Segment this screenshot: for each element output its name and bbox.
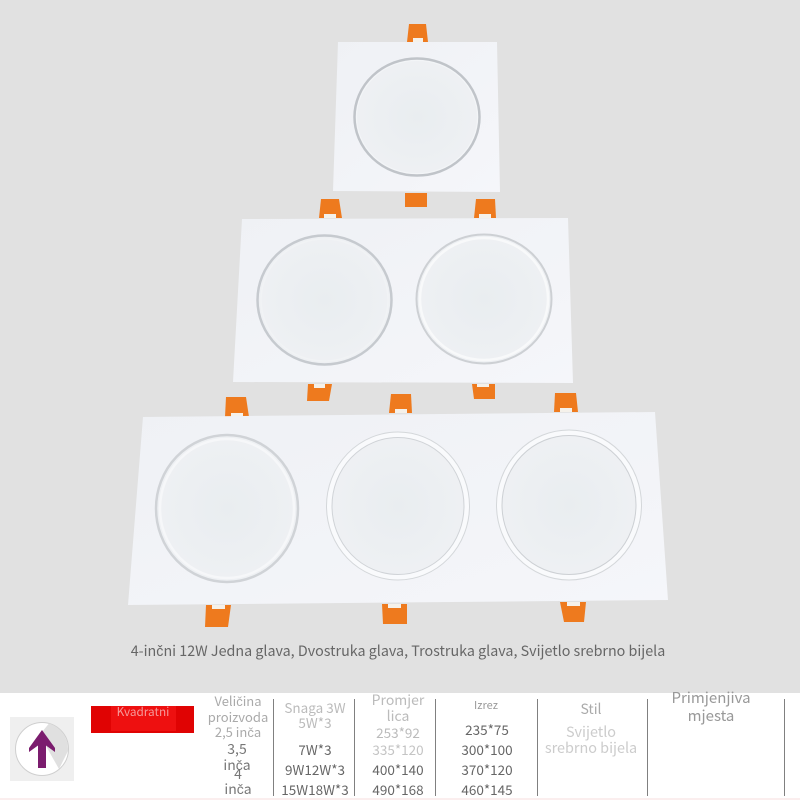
power heading: 5W*3 [298,712,332,732]
face heading [372,690,424,726]
bottom artifact strip [0,798,800,800]
size heading [208,691,268,741]
lens: triple left [156,435,298,582]
style value [545,721,637,758]
size row 4 inch [224,764,252,799]
column: applicable places [671,687,751,726]
size row 3.5 inch: inča [223,755,251,775]
power heading [284,697,346,732]
column: power [281,697,349,799]
lens: triple middle [326,432,470,580]
face row 1: 253*92 [376,722,420,742]
power row 2: 9W12W*3 [285,759,345,779]
size heading: proizvoda [208,707,268,726]
column: cutout [461,697,513,799]
column: applicable places: mjesta [688,705,734,726]
lens: double right [416,234,552,364]
column: product size [208,691,268,799]
column: style [545,699,637,758]
cutout row 3: 370*120 [461,759,513,779]
face heading: Promjer [372,690,424,710]
power heading: Snaga 3W [284,697,346,717]
column: applicable places: Primjenjiva [671,687,751,708]
double-head panel [233,199,573,401]
face row 4: 490*168 [372,779,424,799]
clips: triple head [205,393,586,627]
spec table panel [0,693,800,800]
tag label: Kvadratni [117,703,169,720]
cutout row 4: 460*145 [461,779,513,799]
face row 3: 400*140 [372,759,424,779]
lens: single head [354,58,480,176]
face heading: lica [387,706,409,726]
lens: triple right [496,430,642,580]
triple-head panel [128,393,668,627]
column: face diameter [372,690,424,799]
style value: srebrno bijela [545,737,637,758]
style heading: Stil [580,699,602,719]
power row 3: 15W18W*3 [281,779,349,799]
size row 3.5 inch: 3,5 [227,739,247,759]
face row 2: 335*120 [372,739,424,759]
size row 4 inch: inča [224,779,252,799]
power row 1: 7W*3 [298,739,332,759]
red tag inner highlight [111,706,176,731]
size heading: Veličina [214,691,262,710]
cutout heading: Izrez [474,697,498,713]
red style tag [91,706,194,733]
size row 4 inch: 4 [234,764,242,784]
cutout row 2: 300*100 [461,739,513,759]
single-head panel [333,24,500,207]
cutout row 1: 235*75 [465,719,509,739]
caption: 4-inčni 12W Jedna glava, Dvostruka glava, Trostruka glava, Svijetlo srebrno bijela [131,640,665,661]
lens: double left [258,236,392,364]
clips: single head [405,24,428,207]
style value: Svijetlo [566,721,616,742]
size row 3.5 inch [223,739,251,775]
size heading: 2,5 inča [215,722,261,741]
clips: double head [307,199,496,401]
